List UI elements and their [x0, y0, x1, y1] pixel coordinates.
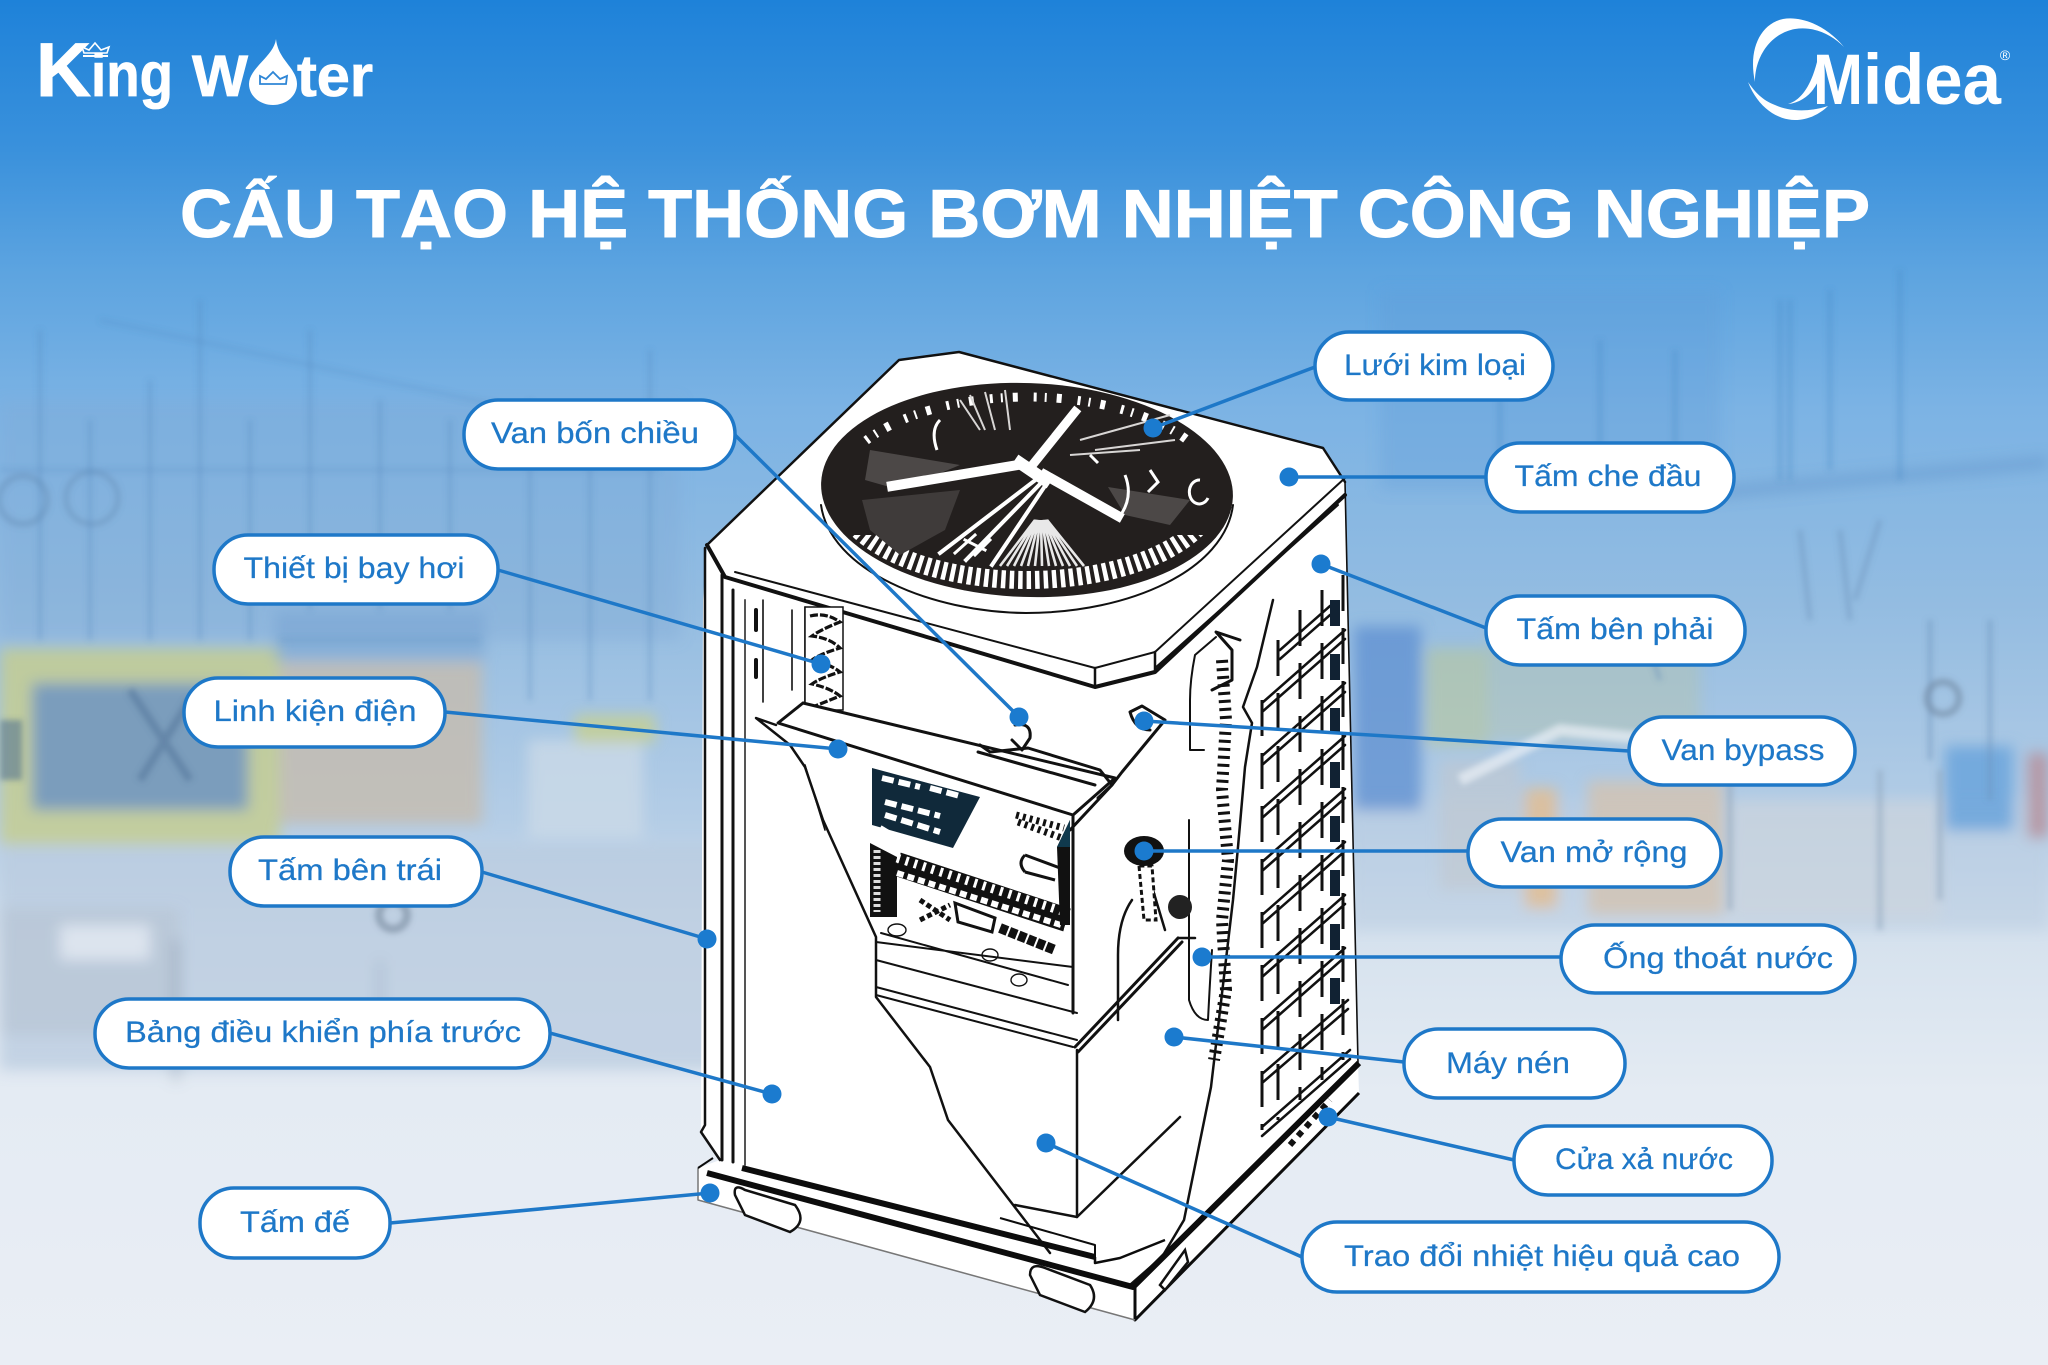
- icon: Midea ring: [1748, 18, 1844, 120]
- logo: King Water: K: [36, 28, 91, 113]
- label: Lưới kim loại: [1315, 332, 1553, 400]
- label: Máy nén: Máy nén: [1446, 1047, 1570, 1080]
- top cover outline: [707, 352, 1358, 1063]
- logo: King Water: [36, 28, 373, 113]
- label: Tấm đế: [200, 1188, 390, 1258]
- label: Van mở rộng: [1468, 819, 1721, 887]
- title: CẤU TẠO HỆ THỐNG BƠM NHIỆT CÔNG NGHIỆP: [180, 175, 1870, 252]
- lower valve body: [1168, 895, 1192, 919]
- heat pump unit illustration: [698, 352, 1359, 1320]
- fan blades: [892, 412, 1118, 565]
- leader lines: [390, 367, 1629, 1257]
- foot left: [735, 1187, 800, 1232]
- label: Thiết bị bay hơi: [214, 535, 498, 604]
- label: Tấm đế: Tấm đế: [240, 1206, 350, 1239]
- label: Tấm bên trái: [230, 837, 482, 906]
- label: Cửa xả nước: [1514, 1126, 1772, 1195]
- label: Tấm che đầu: [1486, 443, 1734, 512]
- label: Tấm bên phải: [1486, 596, 1745, 665]
- label: Van bypass: [1629, 717, 1855, 785]
- expansion valve body: [1124, 836, 1164, 866]
- compressor housing: [876, 938, 1195, 1217]
- fan guard ring: [852, 535, 1204, 589]
- foot right: [1160, 1250, 1188, 1290]
- label: Máy nén: [1404, 1029, 1625, 1098]
- label: Trao đổi nhiệt hiệu quả cao: Trao đổi nhiệt hiệu quả cao: [1344, 1240, 1740, 1273]
- leader dots: [698, 418, 1338, 1202]
- label: Ống thoát nước: [1561, 925, 1855, 993]
- label: Van bốn chiều: [464, 400, 735, 469]
- label: Thiết bị bay hơi: Thiết bị bay hơi: [244, 552, 464, 585]
- logo: Midea: idea: [1863, 41, 2001, 120]
- unit body silhouette: [698, 352, 1359, 1320]
- label: Lưới kim loại: Lưới kim loại: [1344, 349, 1526, 382]
- icon: crown in drop: [260, 72, 287, 84]
- logo: King Water: ing: [91, 41, 173, 110]
- label: Trao đổi nhiệt hiệu quả cao: [1302, 1222, 1779, 1292]
- label: Linh kiện điện: [184, 678, 445, 747]
- electrical box: [756, 703, 1115, 1253]
- icon: water drop: [249, 39, 297, 105]
- foot centre: [1030, 1266, 1094, 1312]
- label: Van bypass: Van bypass: [1662, 734, 1824, 767]
- label: Van bốn chiều: Van bốn chiều: [491, 417, 699, 450]
- evaporator strip: [805, 607, 843, 710]
- logo: Midea: ®: [2000, 47, 2011, 63]
- label: Cửa xả nước: Cửa xả nước: [1555, 1143, 1733, 1176]
- label: Tấm che đầu: Tấm che đầu: [1514, 460, 1702, 493]
- fan blade shadows: [865, 450, 960, 490]
- label: Van mở rộng: Van mở rộng: [1500, 836, 1688, 869]
- logo: King Water: ter: [297, 44, 373, 109]
- logo: Midea: M: [1813, 41, 1863, 120]
- logo: King Water: W: [192, 44, 248, 109]
- label: Bảng điều khiển phía trước: Bảng điều khiển phía trước: [125, 1016, 521, 1049]
- label: Bảng điều khiển phía trước: [95, 999, 550, 1068]
- tear line, pipes and valves: [1112, 600, 1273, 1285]
- label: Ống thoát nước: Ống thoát nước: [1603, 941, 1833, 975]
- circuit board: [872, 768, 980, 848]
- side panel edges: [701, 548, 805, 1165]
- label: Linh kiện điện: Linh kiện điện: [214, 695, 416, 728]
- fan grille: [817, 376, 1237, 604]
- base frame and feet: [698, 1063, 1359, 1320]
- logo: Midea: [1748, 18, 2011, 120]
- label: Tấm bên trái: Tấm bên trái: [258, 854, 442, 887]
- right side fins and grid: [1262, 575, 1350, 1136]
- icon: Midea swoosh: [1788, 58, 1824, 104]
- label: Tấm bên phải: Tấm bên phải: [1516, 613, 1714, 646]
- icon: crown: [82, 43, 109, 57]
